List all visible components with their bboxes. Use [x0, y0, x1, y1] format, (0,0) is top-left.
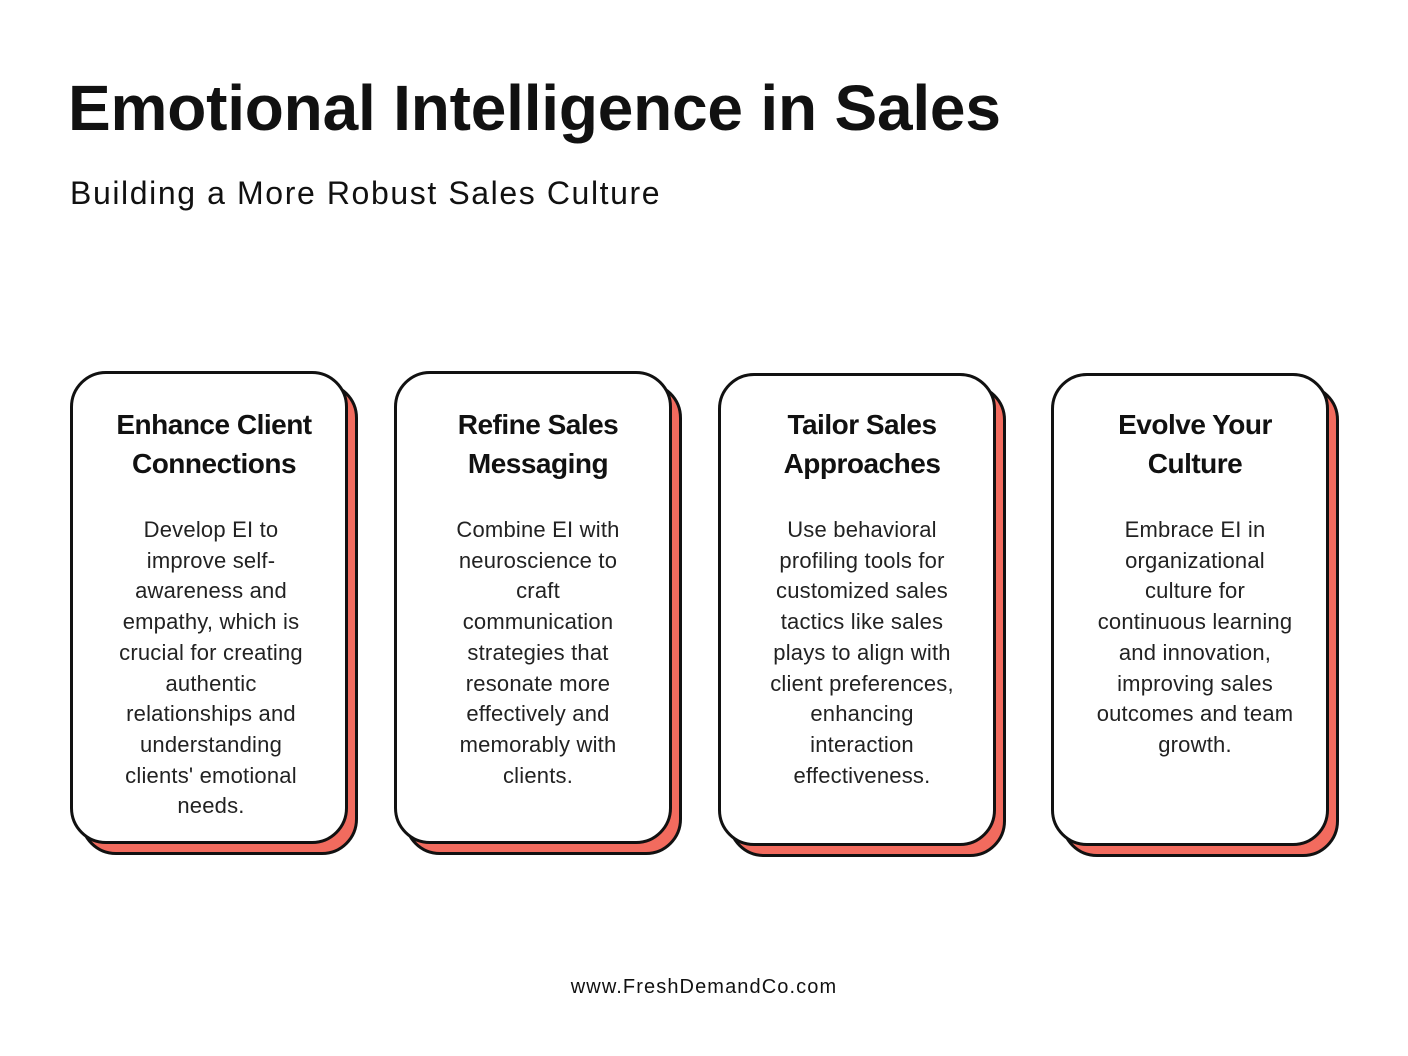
body text: needs.	[177, 793, 245, 818]
body text: customized sales	[776, 578, 948, 603]
panel: refine sales messaging	[394, 371, 682, 855]
body text: continuous learning	[1098, 609, 1292, 634]
body text: culture for	[1145, 578, 1245, 603]
heading	[1118, 409, 1272, 479]
heading: Evolve Your	[1118, 409, 1272, 440]
body text: resonate more	[466, 671, 610, 696]
body text	[770, 517, 954, 788]
body text: client preferences,	[770, 671, 954, 696]
body text: crucial for creating	[119, 640, 303, 665]
body text: empathy, which is	[123, 609, 299, 634]
panel: evolve your culture	[1051, 373, 1339, 857]
body text: growth.	[1158, 732, 1232, 757]
heading: Refine Sales	[458, 409, 618, 440]
body text: understanding	[140, 732, 282, 757]
body text: authentic	[165, 671, 257, 696]
body text: organizational	[1125, 548, 1265, 573]
panel: enhance client connections	[70, 371, 358, 855]
heading: Connections	[132, 448, 296, 479]
body text: Embrace EI in	[1125, 517, 1265, 542]
body text: improving sales	[1117, 671, 1273, 696]
footer url: www.FreshDemandCo.com	[571, 976, 837, 998]
body text	[1097, 517, 1293, 757]
body text: improve self-	[147, 548, 275, 573]
body text: Develop EI to	[144, 517, 278, 542]
subtitle: Building a More Robust Sales Culture	[70, 175, 661, 211]
heading	[784, 409, 940, 479]
body text: effectiveness.	[794, 763, 930, 788]
body text	[119, 517, 303, 818]
heading: Messaging	[468, 448, 608, 479]
body text: neuroscience to	[459, 548, 617, 573]
body text: Use behavioral	[787, 517, 937, 542]
body text: communication	[463, 609, 613, 634]
body text: relationships and	[126, 701, 296, 726]
body text: Combine EI with	[456, 517, 620, 542]
body text: clients.	[503, 763, 573, 788]
body text: outcomes and team	[1097, 701, 1293, 726]
body text: craft	[516, 578, 560, 603]
body text: strategies that	[467, 640, 609, 665]
body text	[456, 517, 620, 788]
heading: Culture	[1148, 448, 1242, 479]
heading: Tailor Sales	[787, 409, 937, 440]
body text: awareness and	[135, 578, 287, 603]
body text: enhancing	[810, 701, 914, 726]
panel: tailor sales approaches	[718, 373, 1006, 857]
title: Emotional Intelligence in Sales	[68, 72, 1001, 144]
body text: interaction	[810, 732, 914, 757]
heading	[458, 409, 618, 479]
body text: profiling tools for	[779, 548, 945, 573]
heading: Enhance Client	[116, 409, 312, 440]
body text: clients' emotional	[125, 763, 297, 788]
heading: Approaches	[784, 448, 940, 479]
body text: and innovation,	[1119, 640, 1271, 665]
body text: tactics like sales	[781, 609, 943, 634]
heading	[116, 409, 312, 479]
body text: plays to align with	[773, 640, 951, 665]
body text: memorably with	[460, 732, 616, 757]
body text: effectively and	[466, 701, 610, 726]
